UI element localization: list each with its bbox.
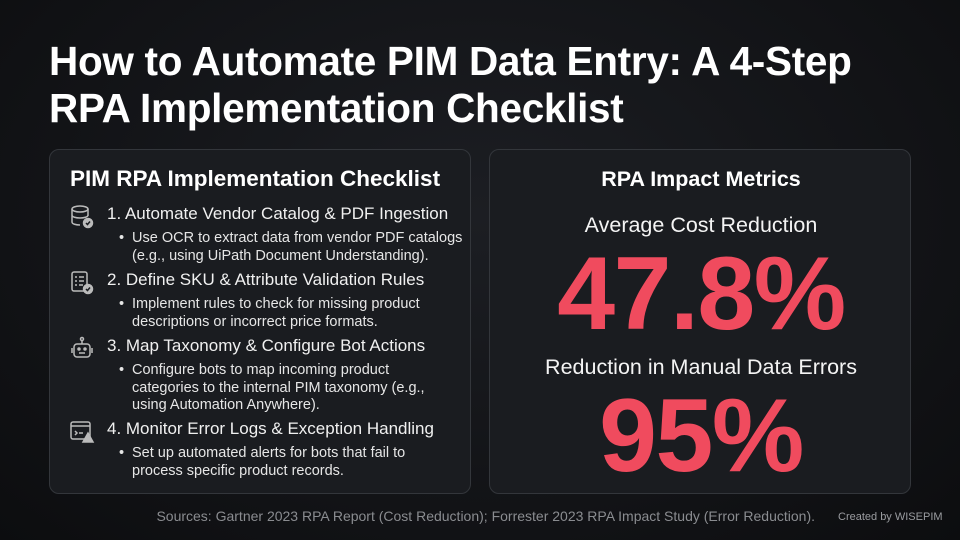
icon: database: [71, 205, 94, 228]
label: cost reduction: Average Cost Reduction: [585, 213, 817, 237]
bullet 3: categories to the internal PIM taxonomy (e.g.,: [132, 380, 425, 396]
credit: Created by WISEPIM: [838, 511, 943, 523]
step 2: 2. Define SKU & Attribute Validation Rules: [107, 270, 424, 289]
icon: error log: [70, 421, 94, 443]
step 4: 4. Monitor Error Logs & Exception Handling: [107, 419, 434, 438]
stat: 95%: 95%: [599, 378, 803, 494]
sources footer: Sources: Gartner 2023 RPA Report (Cost Reduction); Forrester 2023 RPA Impact Study (Error Reduction).: [156, 508, 815, 524]
step 2: [71, 270, 424, 330]
step 4: [70, 419, 434, 478]
icon: robot: [71, 336, 93, 358]
checklist heading: PIM RPA Implementation Checklist: [70, 166, 440, 191]
icon: checklist: [71, 271, 94, 294]
title: [49, 38, 852, 131]
title: How to Automate PIM Data Entry: A 4-Step: [49, 38, 852, 84]
bullet 1: Use OCR to extract data from vendor PDF catalogs: [132, 230, 462, 246]
step 3: [71, 336, 425, 413]
bullet 1: (e.g., using UiPath Document Understanding).: [132, 248, 429, 264]
bullet 4: process specific product records.: [132, 462, 344, 478]
stat: 47.8%: 47.8%: [557, 236, 845, 352]
step 1: [71, 204, 462, 264]
step 3: 3. Map Taxonomy & Configure Bot Actions: [107, 336, 425, 355]
bullet 4: Set up automated alerts for bots that fail to: [132, 445, 405, 461]
bullet 2: Implement rules to check for missing product: [132, 296, 420, 312]
panel: metrics: [489, 149, 911, 494]
step 1: 1. Automate Vendor Catalog & PDF Ingestion: [107, 204, 448, 223]
bullet 3: using Automation Anywhere).: [132, 397, 320, 413]
bullet 3: [132, 362, 425, 414]
bullet 3: Configure bots to map incoming product: [132, 362, 389, 378]
bullet 4: [132, 445, 405, 480]
panel: checklist: [49, 149, 471, 494]
title: RPA Implementation Checklist: [49, 85, 623, 131]
bullet 2: descriptions or incorrect price formats.: [132, 314, 378, 330]
bullet 2: [132, 296, 420, 331]
bullet 1: [132, 230, 462, 265]
label: data errors: Reduction in Manual Data Errors: [545, 355, 857, 379]
metrics heading: RPA Impact Metrics: [601, 167, 801, 191]
